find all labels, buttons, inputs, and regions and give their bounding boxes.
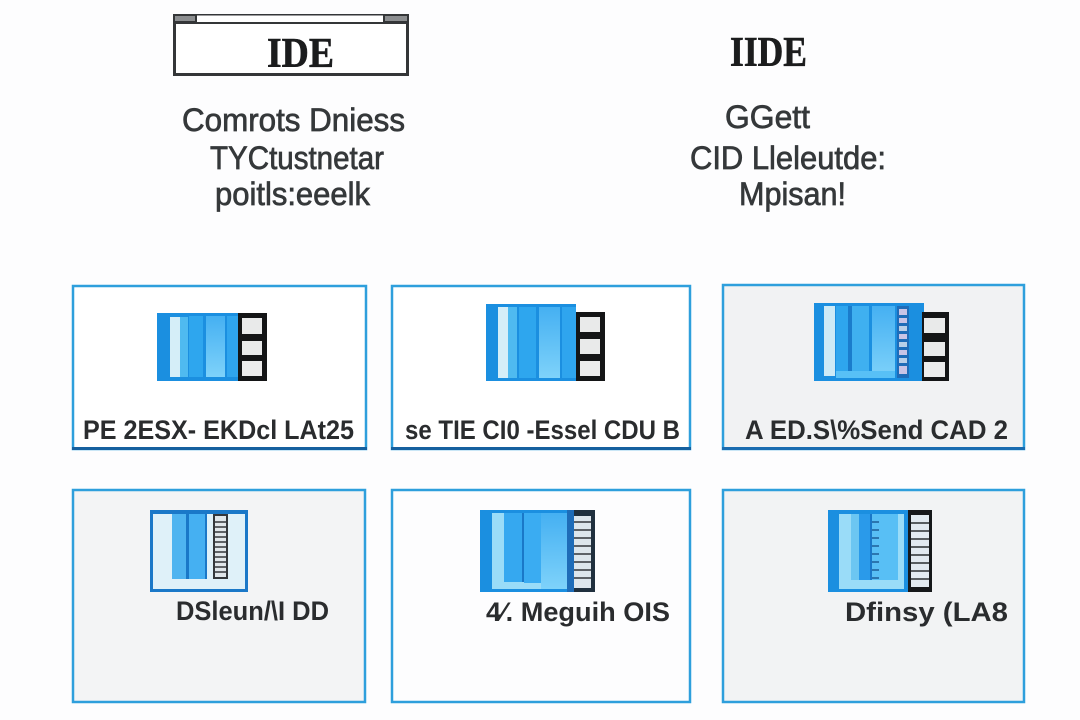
label: card 3: A ED.S\%Send CAD 2 [745, 415, 1008, 445]
icon: module 1 [157, 313, 267, 381]
panel: card 4 [73, 490, 365, 702]
icon: module 2 [486, 304, 605, 381]
text block: left description: poitls:eeelk [215, 176, 371, 212]
panel: card 2 [391, 286, 691, 450]
text block: left description [182, 102, 405, 212]
panel: card 1 [72, 286, 367, 450]
text block: left description: TYCtustnetar [210, 140, 384, 176]
text block: left description: Comrots Dniess [182, 102, 405, 138]
header box: left IDE [173, 14, 409, 77]
header box: left IDE: IDE [267, 31, 334, 77]
text block: right description: GGett [725, 99, 810, 135]
heading: right IDE: IIDE [730, 30, 807, 76]
panel: card 3 [722, 285, 1025, 450]
text block: right description: Mpisan! [739, 176, 846, 212]
icon: module 3 [814, 303, 949, 381]
text block: right description [690, 99, 886, 212]
icon: module 6 [828, 510, 932, 592]
label: card 4: DSleun/\I DD [176, 596, 329, 626]
icon: module 5 [480, 510, 595, 592]
label: card 1: PE 2ESX- EKDcl LAt25 [83, 415, 354, 445]
text block: right description: CID Lleleutde: [690, 140, 886, 176]
label: card 6: Dfinsy (LA8 [845, 597, 1008, 627]
panel: card 5 [392, 490, 690, 702]
panel: card 6 [723, 490, 1024, 702]
label: card 5: 4⁄. Meguih OIS [486, 597, 670, 627]
icon: module 4 [150, 510, 248, 592]
label: card 2: se TIE CI0 -Essel CDU B [405, 415, 680, 445]
